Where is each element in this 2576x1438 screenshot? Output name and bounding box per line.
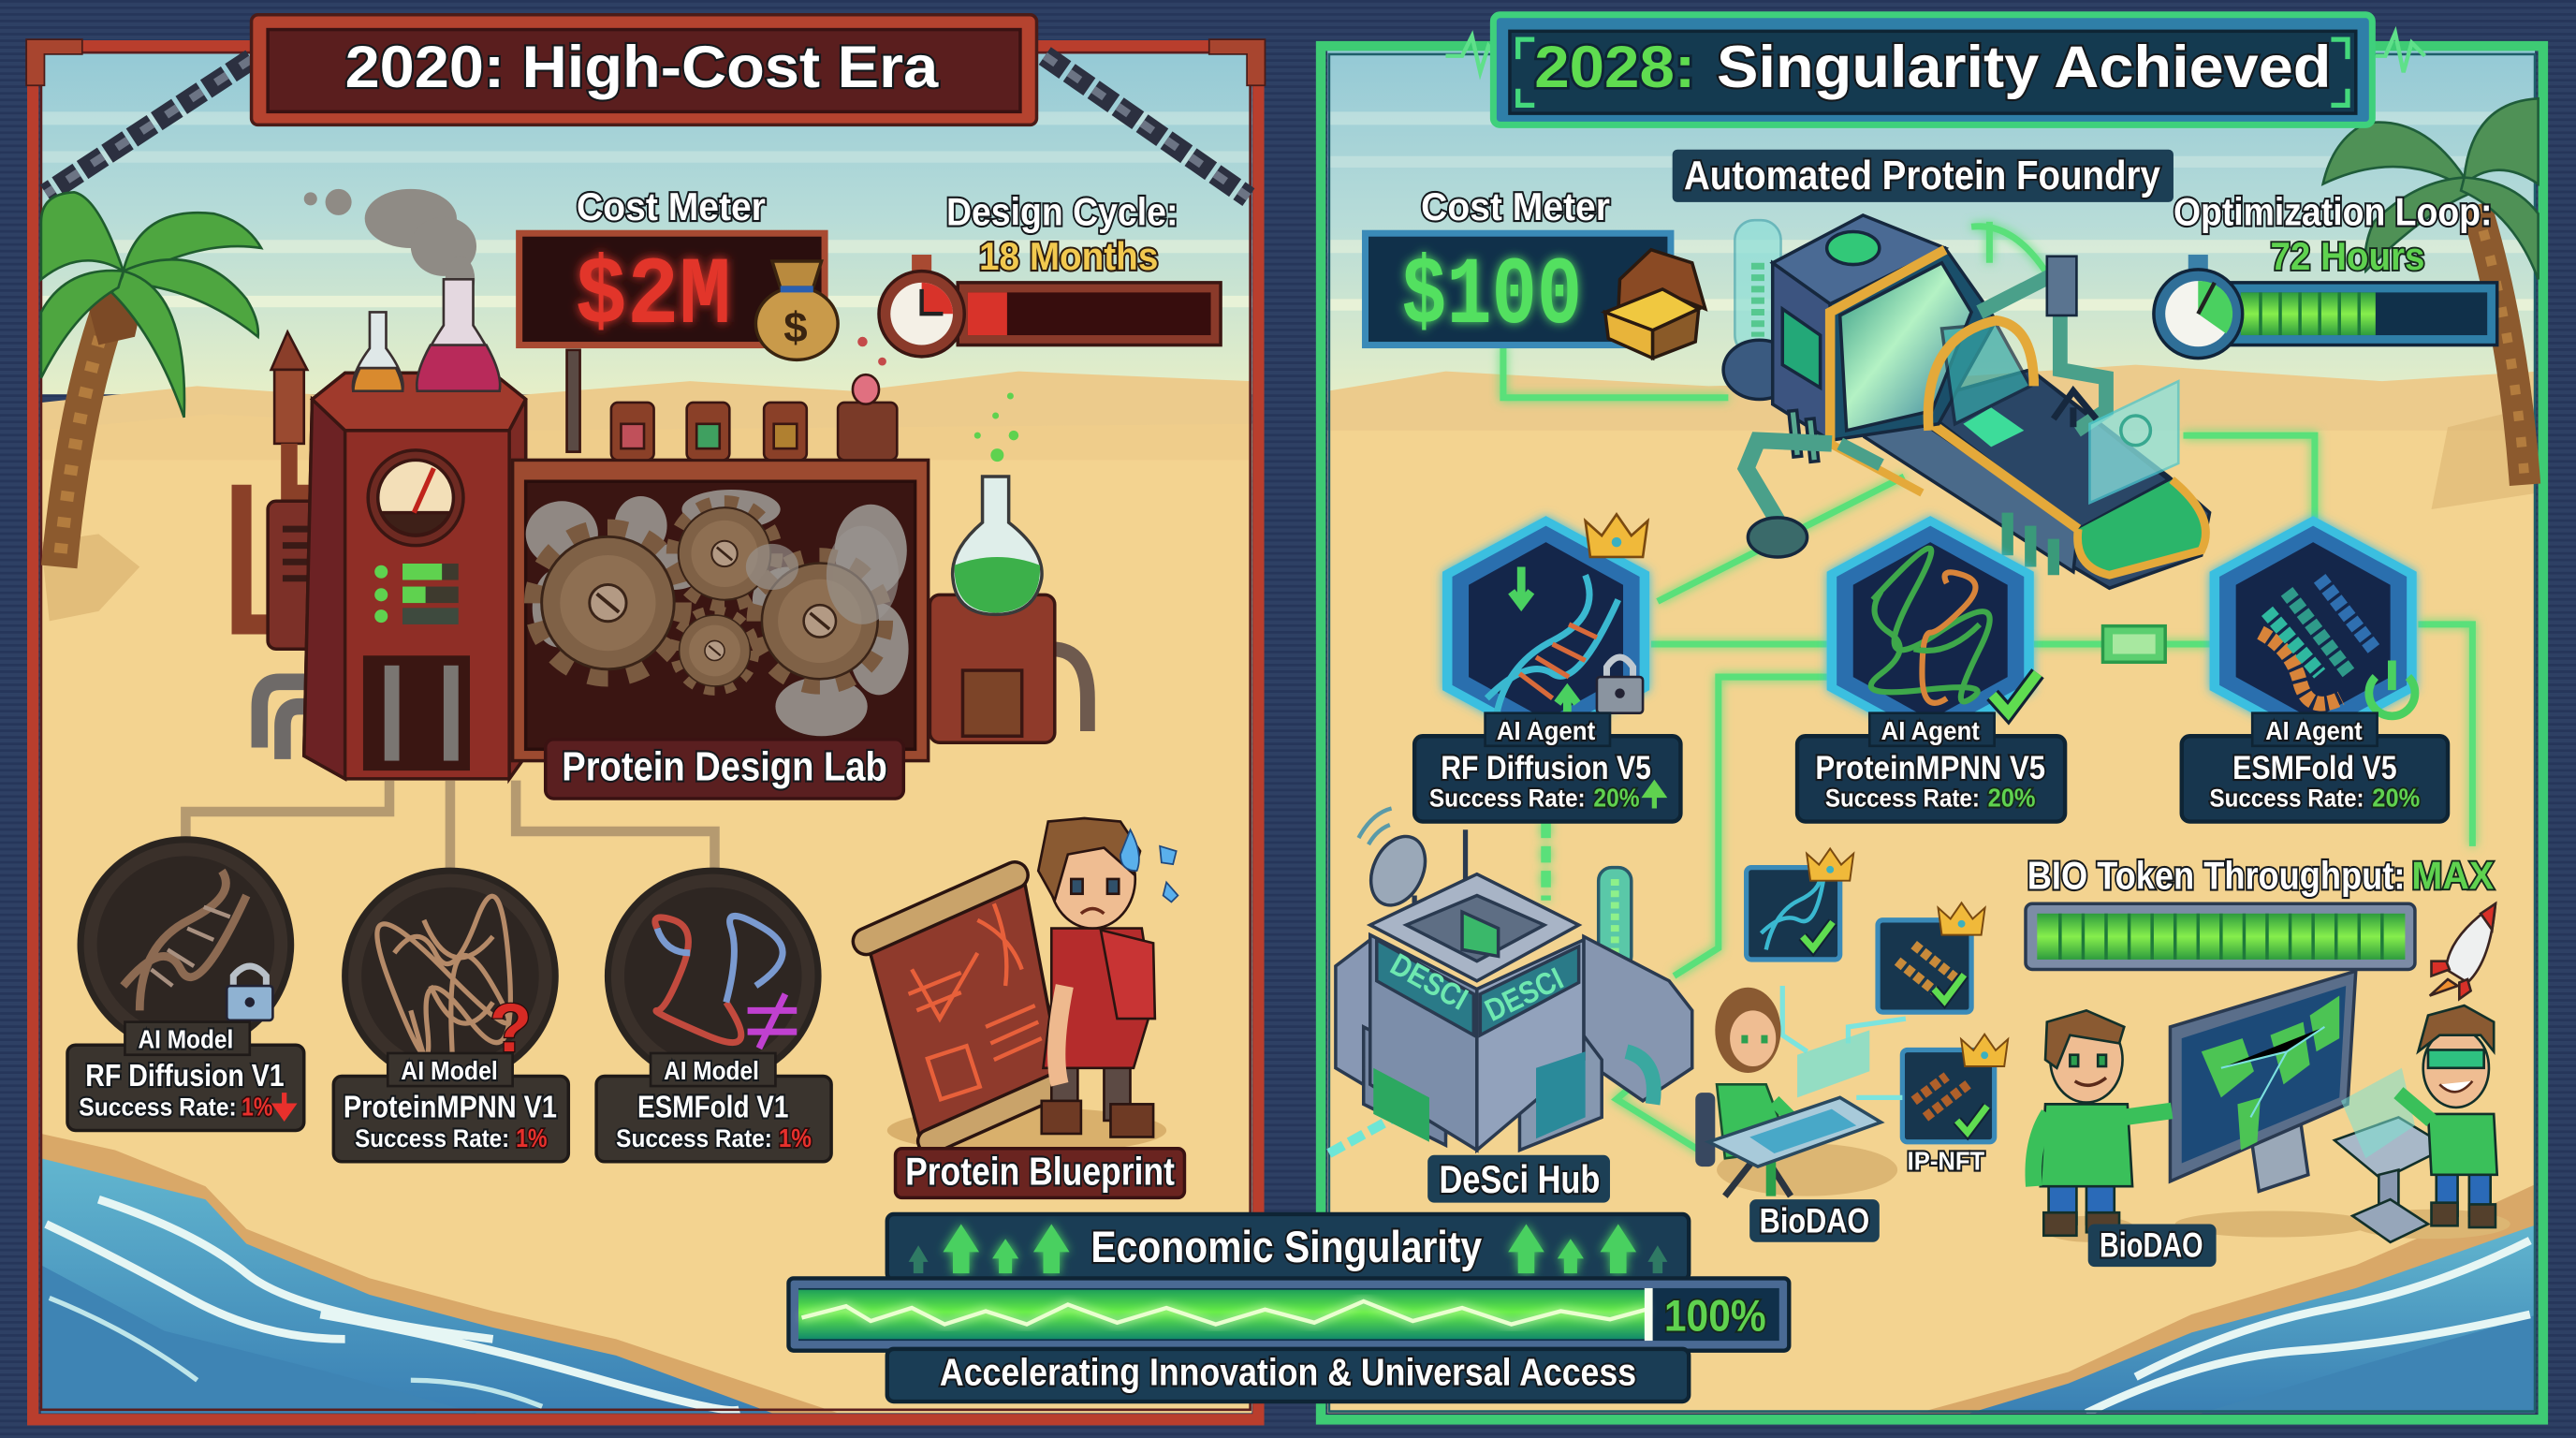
machine: top vials [567,350,897,460]
panel: economic singularity [788,1214,1789,1401]
chains [46,56,1249,198]
header: 2028 singularity achieved [1493,15,2372,125]
label: ip-nft: IP-NFT [1908,1147,1984,1176]
model: esmfold v1 [596,871,831,1162]
character: engineer with blueprint [849,818,1178,1158]
label: esmfold v5 [2182,713,2448,822]
stopwatch: optimization loop [2154,189,2497,359]
figure [1038,818,1155,1137]
label: esmfold v5: Success Rate: [2210,784,2364,813]
label: rf diffusion v1: AI Model [138,1025,233,1054]
label: esmfold v1: ESMFold V1 [637,1090,788,1124]
stopwatch: optimization loop: Optimization Loop: [2174,189,2492,233]
progress bar: 100 percent: 100% [1664,1292,1766,1342]
icon: left palm tree [41,192,261,566]
cost meter: right [1365,184,1705,359]
icon: question mark: ? [490,989,532,1066]
machine: gear box [513,460,929,761]
building: desci hub [1336,808,1692,1151]
machine: left pipes and spire [242,332,330,759]
hub: desci signage: DESCI [1384,947,1473,1018]
scene: left beach [33,41,1265,1416]
label: automated protein foundry: Automated Protein Foundry [1684,153,2160,198]
label: proteinmpnn v1 [333,1053,568,1162]
label: rf diffusion v1: RF Diffusion V1 [85,1059,285,1093]
machine: tower [304,373,526,779]
circuit traces [1503,222,2472,1155]
hub: entrance [1373,1051,1654,1142]
frame: left border [26,39,1265,1419]
label: rf diffusion v1 [67,1022,304,1130]
banner: economic singularity [887,1214,1689,1280]
frame: right border [1321,33,2543,1419]
label: protein design lab [546,740,903,799]
cost meter: left [520,184,838,360]
label: proteinmpnn v1: AI Model [401,1056,498,1085]
stopwatch: design cycle [879,189,1221,357]
label: proteinmpnn v1: Success Rate: [355,1123,509,1152]
foundry: robot arm [1980,257,2106,431]
icons: rising arrows [943,1224,1636,1273]
label: proteinmpnn v5: Success Rate: [1825,784,1980,813]
label: esmfold v5: ESMFold V5 [2232,750,2397,786]
hub: main tower [1370,874,1584,1151]
header: 2028 singularity achieved: 2028: [1534,35,1695,100]
icon: blueprint scroll [849,858,1075,1158]
header: 2020 high-cost era [252,15,1036,125]
label: esmfold v5: AI Agent [2265,716,2363,745]
scene: right beach [1314,41,2550,1416]
links: cards to workstation [1782,986,1906,1097]
icon: faded dna [124,871,246,1010]
icon: lock [227,966,272,1020]
cost meter: left: $2M [575,242,731,351]
cost meter: right: Cost Meter [1421,184,1610,228]
foundry: main block [1773,215,2034,493]
header: 2028 singularity achieved: Singularity Achieved [1717,35,2331,100]
label: esmfold v1: 1% [779,1123,812,1152]
foundry: holographic screen [2089,381,2178,503]
icon: lock [1597,657,1643,713]
panel: 2020 high-cost era [26,15,1265,1419]
label: rf diffusion v1: 1% [242,1093,272,1122]
workstation [1708,1097,1881,1167]
label: rf diffusion v5 [1414,713,1680,822]
label: esmfold v1 [596,1053,831,1162]
label: esmfold v5: 20% [2372,784,2420,813]
label: proteinmpnn v5: AI Agent [1881,716,1980,745]
icon: big pink flask [417,279,500,391]
agent: esmfold v5 [2182,516,2448,822]
label: proteinmpnn v5: ProteinMPNN V5 [1815,750,2045,786]
icon: money bag: $ [783,303,808,351]
icon: not-equal symbol [748,994,797,1049]
icon: folded structure [2261,579,2374,704]
progress bar: 100 percent [788,1278,1789,1351]
icon: power symbol [2369,661,2415,716]
icon: treasure chest [1605,250,1705,359]
label: biodao 1: BioDAO [1760,1201,1869,1240]
label: rf diffusion v5: 20% [1593,784,1640,813]
icon: rocket [2430,903,2496,999]
hub: signal and dish [1358,808,1466,945]
agent: rf diffusion v5 [1414,514,1680,822]
character: biodao researcher [1695,988,1897,1196]
foundry: conveyor [1856,370,2210,588]
label: biodao 2: BioDAO [2100,1226,2203,1265]
label: proteinmpnn v5: 20% [1988,784,2036,813]
machine: side cabinet with green flask [929,477,1088,742]
icon: tangled protein [377,896,510,1106]
monitor: world map [2170,971,2372,1238]
panel: 2028 singularity achieved [1314,15,2550,1419]
meter: bio token throughput [2026,903,2415,969]
stopwatch: design cycle: 18 Months [979,234,1158,278]
icon: broken protein chain [655,916,783,1043]
icon: dna [1486,575,1618,723]
header: 2020 high-cost era: 2020: High-Cost Era [345,35,939,100]
hub: desci signage [1384,947,1569,1029]
machine: automated protein foundry [1723,215,2210,588]
cost meter: right: $100 [1401,242,1582,351]
character: biodao operator with console [2334,1005,2510,1242]
banner: economic singularity: Economic Singularity [1090,1223,1483,1272]
label: rf diffusion v5: RF Diffusion V5 [1441,750,1651,786]
label: rf diffusion v5: AI Agent [1497,716,1595,745]
stopwatch: optimization loop: 72 Hours [2271,234,2424,278]
label: proteinmpnn v5 [1797,713,2065,822]
icon: money bag [755,261,838,360]
hub: wings [1336,936,1692,1151]
ip-nft card 1 [1747,848,1853,960]
label: protein blueprint: Protein Blueprint [905,1149,1175,1193]
icon: small orange flask [353,312,403,391]
label: proteinmpnn v1: 1% [516,1123,548,1152]
foundry: left leg arm [1747,440,1881,557]
agent: proteinmpnn v5 [1797,516,2065,822]
icon: sweat drops [1120,829,1178,902]
icon: circuit chip [2102,626,2165,662]
icon: check mark [1993,673,2038,712]
machine: status lights [374,564,459,761]
icon: smoke [304,189,476,302]
icon: folded protein [1871,549,1990,703]
ip-nft card 2 [1878,902,1985,1012]
label: rf diffusion v1: Success Rate: [79,1093,237,1122]
hub: glass tank [1599,868,1632,969]
foundry: glass column [1723,220,1795,399]
cost meter: left: Cost Meter [577,184,766,228]
model: rf diffusion v1 [67,840,304,1130]
banner: accelerating innovation: Accelerating Innovation & Universal Access [940,1350,1636,1393]
label: esmfold v1: AI Model [664,1056,759,1085]
label: desci hub: DeSci Hub [1439,1157,1600,1201]
icon: crown [1586,514,1647,557]
machine: protein design lab [242,279,1088,779]
label: esmfold v1: Success Rate: [616,1123,772,1152]
hub: desci signage: DESCI [1480,961,1569,1029]
label: protein design lab: Protein Design Lab [562,744,887,790]
label: proteinmpnn v1: ProteinMPNN V1 [344,1090,557,1124]
ip-nft card 3 [1902,1034,2008,1142]
character: biodao presenter [2033,1010,2172,1242]
pipes: lab to models [185,781,714,877]
label: bio token throughput: MAX [2411,853,2494,897]
label: rf diffusion v5: Success Rate: [1429,784,1586,813]
label: bio token throughput: BIO Token Throughput: [2027,853,2405,897]
stopwatch: design cycle: Design Cycle: [946,189,1178,233]
icon: right palm tree [2323,98,2539,485]
model: proteinmpnn v1 [333,871,568,1162]
